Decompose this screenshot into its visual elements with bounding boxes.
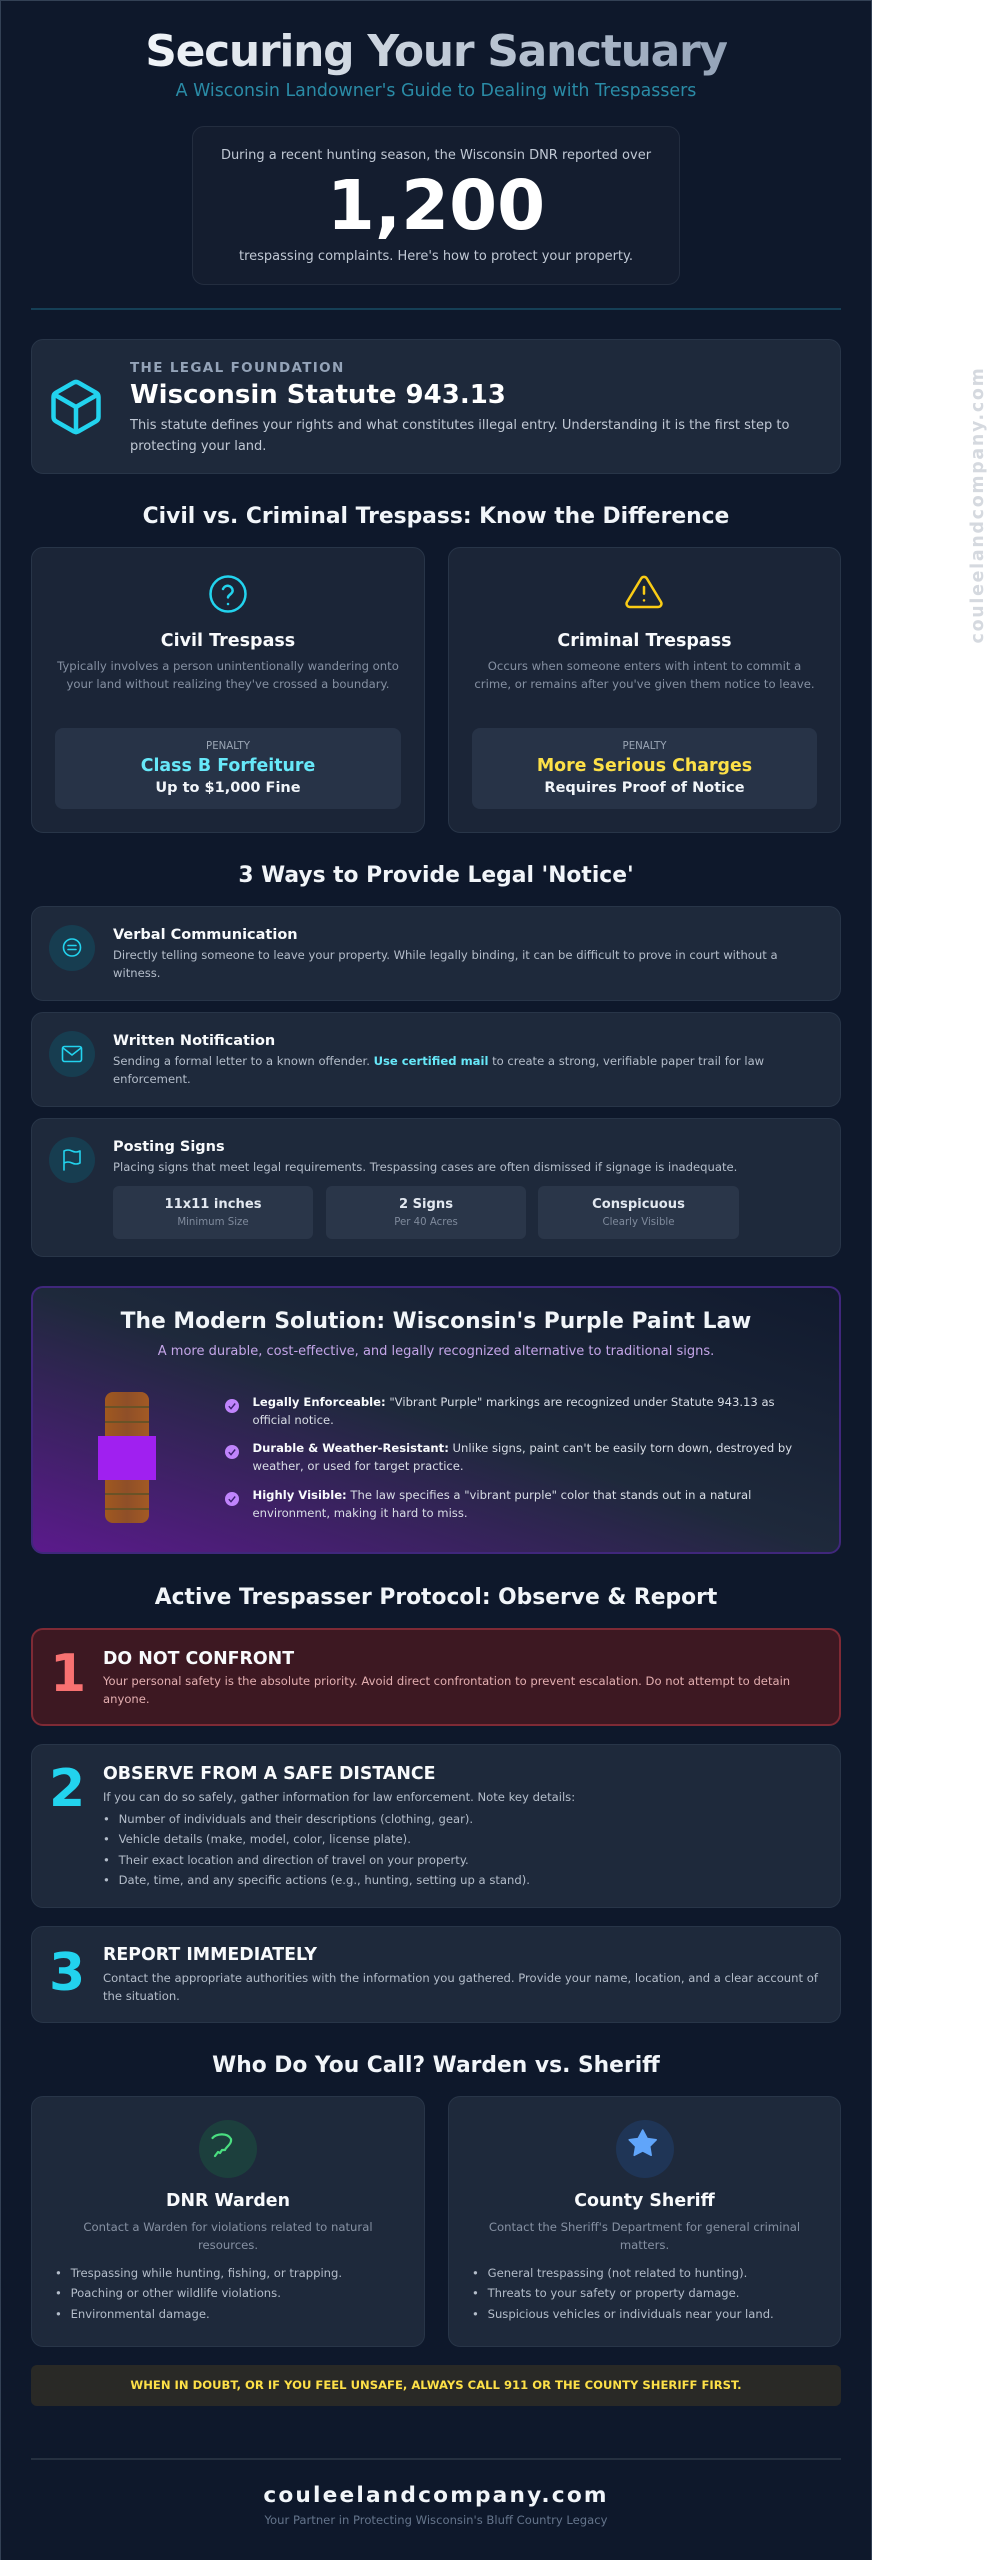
list: General trespassing (not related to hunting).	[488, 2266, 747, 2280]
text: enforcement.	[113, 1072, 191, 1086]
list	[55, 2266, 342, 2321]
divider	[31, 308, 841, 310]
list	[103, 1812, 530, 1887]
description: Occurs when someone enters with intent to commit a	[488, 659, 801, 673]
list: Poaching or other wildlife violations.	[71, 2286, 281, 2300]
panel: step 1	[31, 1628, 841, 1726]
title: Criminal Trespass	[557, 631, 732, 651]
description: crime, or remains after you've given them notice to leave.	[474, 676, 815, 690]
icon: question	[209, 575, 247, 613]
description: matters.	[620, 2238, 669, 2252]
label: THE LEGAL FOUNDATION	[130, 360, 345, 376]
stat: minimum size	[113, 1186, 313, 1239]
text: official notice.	[252, 1412, 334, 1426]
stat number: 1,200	[327, 166, 545, 246]
icon: check	[225, 1399, 239, 1413]
list: Date, time, and any specific actions (e.g., hunting, setting up a stand).	[119, 1873, 530, 1887]
list: Environmental damage.	[71, 2307, 210, 2321]
description	[57, 659, 399, 690]
icon: speech	[49, 925, 95, 971]
text: If you can do so safely, gather information for law enforcement. Note key details:	[103, 1790, 575, 1804]
description: resources.	[198, 2238, 258, 2252]
panel: written notification	[31, 1012, 841, 1107]
icon: box	[51, 380, 101, 434]
list: •	[472, 2266, 479, 2280]
list: Threats to your safety or property damage.	[488, 2286, 739, 2300]
penalty name: More Serious Charges	[537, 756, 752, 776]
stat: minimum size: 11x11 inches	[164, 1197, 262, 1212]
callout: call 911: WHEN IN DOUBT, OR IF YOU FEEL UNSAFE, ALWAYS CALL 911 OR THE COUNTY SHERIFF FIRST.	[130, 2378, 742, 2392]
stat: minimum size: Minimum Size	[177, 1217, 249, 1228]
title: Written Notification	[113, 1033, 275, 1049]
panel: civil trespass	[31, 547, 425, 833]
description: Contact a Warden for violations related to natural	[83, 2220, 373, 2234]
text	[113, 1054, 764, 1086]
text: Durable & Weather-Resistant: Unlike signs, paint can't be easily torn down, destroyed by	[252, 1441, 792, 1455]
stat: visibility: Clearly Visible	[602, 1217, 675, 1228]
list: •	[55, 2307, 62, 2321]
list: •	[55, 2286, 62, 2300]
subtitle: A Wisconsin Landowner's Guide to Dealing with Trespassers	[176, 81, 696, 101]
stat: sign count: 2 Signs	[399, 1197, 453, 1212]
heading: protocol: Active Trespasser Protocol: Observe & Report	[155, 1585, 717, 1610]
benefit 1	[225, 1395, 775, 1426]
penalty label: PENALTY	[206, 741, 250, 752]
stat intro: During a recent hunting season, the Wisconsin DNR reported over	[221, 148, 651, 163]
text: Highly Visible: The law specifies a "vibrant purple" color that stands out in a natural	[252, 1488, 751, 1502]
stat outro: trespassing complaints. Here's how to protect your property.	[239, 249, 633, 264]
icon: ranger mark	[199, 2120, 257, 2178]
icon: flag	[49, 1137, 95, 1183]
list: •	[472, 2307, 479, 2321]
heading: notice: 3 Ways to Provide Legal 'Notice'	[238, 863, 634, 888]
statute text: protecting your land.	[130, 438, 266, 454]
heading: The Modern Solution: Wisconsin's Purple Paint Law	[121, 1309, 751, 1334]
description	[83, 2220, 373, 2252]
heading: civil vs criminal: Civil vs. Criminal Trespass: Know the Difference	[143, 504, 729, 529]
list: Trespassing while hunting, fishing, or trapping.	[71, 2266, 342, 2280]
text	[252, 1395, 775, 1426]
panel: county sheriff	[448, 2096, 841, 2347]
footer tagline: Your Partner in Protecting Wisconsin's Bluff Country Legacy	[265, 2513, 607, 2527]
title: OBSERVE FROM A SAFE DISTANCE	[103, 1764, 436, 1784]
title: DO NOT CONFRONT	[103, 1649, 294, 1669]
divider	[31, 2458, 841, 2460]
title: REPORT IMMEDIATELY	[103, 1945, 317, 1965]
list: •	[103, 1873, 110, 1887]
description: Contact the Sheriff's Department for general criminal	[489, 2220, 800, 2234]
stat: visibility: Conspicuous	[592, 1197, 685, 1212]
text: Sending a formal letter to a known offender. Use certified mail to create a strong, verifiable paper trail for law	[113, 1054, 764, 1068]
title: Civil Trespass	[161, 631, 295, 651]
icon: star	[616, 2120, 674, 2178]
number: 2	[49, 1759, 85, 1819]
list: •	[103, 1832, 110, 1846]
list: •	[103, 1853, 110, 1867]
title: Verbal Communication	[113, 927, 298, 943]
text: the situation.	[103, 1988, 180, 2002]
text: Directly telling someone to leave your property. While legally binding, it can be difficult to prove in court without a	[113, 948, 778, 962]
callout: call 911	[31, 2365, 841, 2406]
penalty box	[472, 728, 817, 809]
statute text: This statute defines your rights and what constitutes illegal entry. Understanding it is the first step to	[130, 418, 789, 433]
icon: check	[225, 1445, 239, 1459]
stat: sign count	[326, 1186, 526, 1239]
panel: posting signs	[31, 1118, 841, 1257]
panel: step 2	[31, 1744, 841, 1908]
description: your land without realizing they've crossed a boundary.	[66, 676, 390, 690]
text: environment, making it hard to miss.	[252, 1506, 468, 1520]
description	[474, 659, 815, 690]
list: Their exact location and direction of travel on your property.	[119, 1853, 469, 1867]
text	[103, 1674, 790, 1706]
icon: warning triangle	[625, 576, 663, 608]
text: Legally Enforceable: "Vibrant Purple" markings are recognized under Statute 943.13 as	[252, 1395, 775, 1409]
stat: sign count: Per 40 Acres	[394, 1217, 458, 1228]
list: Suspicious vehicles or individuals near your land.	[488, 2307, 774, 2321]
description	[489, 2220, 800, 2252]
illustration: painted post	[98, 1392, 156, 1523]
title: Posting Signs	[113, 1139, 225, 1155]
title: Securing Your Sanctuary	[145, 26, 727, 77]
penalty name: Class B Forfeiture	[141, 756, 315, 776]
icon: envelope	[49, 1031, 95, 1077]
text	[252, 1488, 751, 1520]
list	[472, 2266, 774, 2321]
penalty box	[55, 728, 401, 809]
panel: criminal trespass	[448, 547, 841, 833]
heading: who to call: Who Do You Call? Warden vs. Sheriff	[212, 2053, 660, 2078]
list: •	[103, 1812, 110, 1826]
panel: purple paint law	[31, 1286, 841, 1554]
list: Number of individuals and their descriptions (clothing, gear).	[119, 1812, 473, 1826]
panel: verbal communication	[31, 906, 841, 1001]
statute heading: Wisconsin Statute 943.13	[130, 380, 506, 410]
benefit 3	[225, 1488, 751, 1520]
list: •	[55, 2266, 62, 2280]
text: Your personal safety is the absolute priority. Avoid direct confrontation to prevent escalation. Do not attempt to detain	[103, 1674, 790, 1688]
text: witness.	[113, 966, 160, 980]
number: 3	[49, 1943, 85, 2003]
panel: step 3	[31, 1926, 841, 2023]
description: Typically involves a person unintentionally wandering onto	[57, 659, 399, 673]
penalty label: PENALTY	[623, 741, 666, 752]
panel: DNR warden	[31, 2096, 425, 2347]
penalty detail: Requires Proof of Notice	[544, 780, 745, 796]
list: •	[472, 2286, 479, 2300]
footer brand: couleelandcompany.com	[263, 2483, 609, 2508]
penalty detail: Up to $1,000 Fine	[155, 780, 301, 796]
text: weather, or used for target practice.	[252, 1458, 464, 1472]
text	[252, 1441, 792, 1472]
text: anyone.	[103, 1692, 150, 1706]
text	[103, 1971, 818, 2002]
text: Placing signs that meet legal requirements. Trespassing cases are often dismissed if signage is inadequate.	[113, 1160, 737, 1174]
icon: check	[225, 1492, 239, 1506]
title: DNR Warden	[166, 2191, 290, 2211]
number: 1	[50, 1644, 86, 1704]
list: Vehicle details (make, model, color, license plate).	[119, 1832, 411, 1846]
stat: visibility	[538, 1186, 739, 1239]
benefit 2	[225, 1441, 792, 1472]
statute text	[130, 418, 789, 454]
subheading: A more durable, cost-effective, and legally recognized alternative to traditional signs.	[158, 1344, 714, 1359]
text: Contact the appropriate authorities with the information you gathered. Provide your name, location, and a clear account of	[103, 1971, 818, 1985]
panel: stat box	[192, 126, 680, 285]
text	[113, 948, 778, 980]
panel: legal foundation	[31, 339, 841, 474]
title: County Sheriff	[574, 2191, 715, 2211]
watermark: couleelandcompany.com	[968, 367, 988, 643]
